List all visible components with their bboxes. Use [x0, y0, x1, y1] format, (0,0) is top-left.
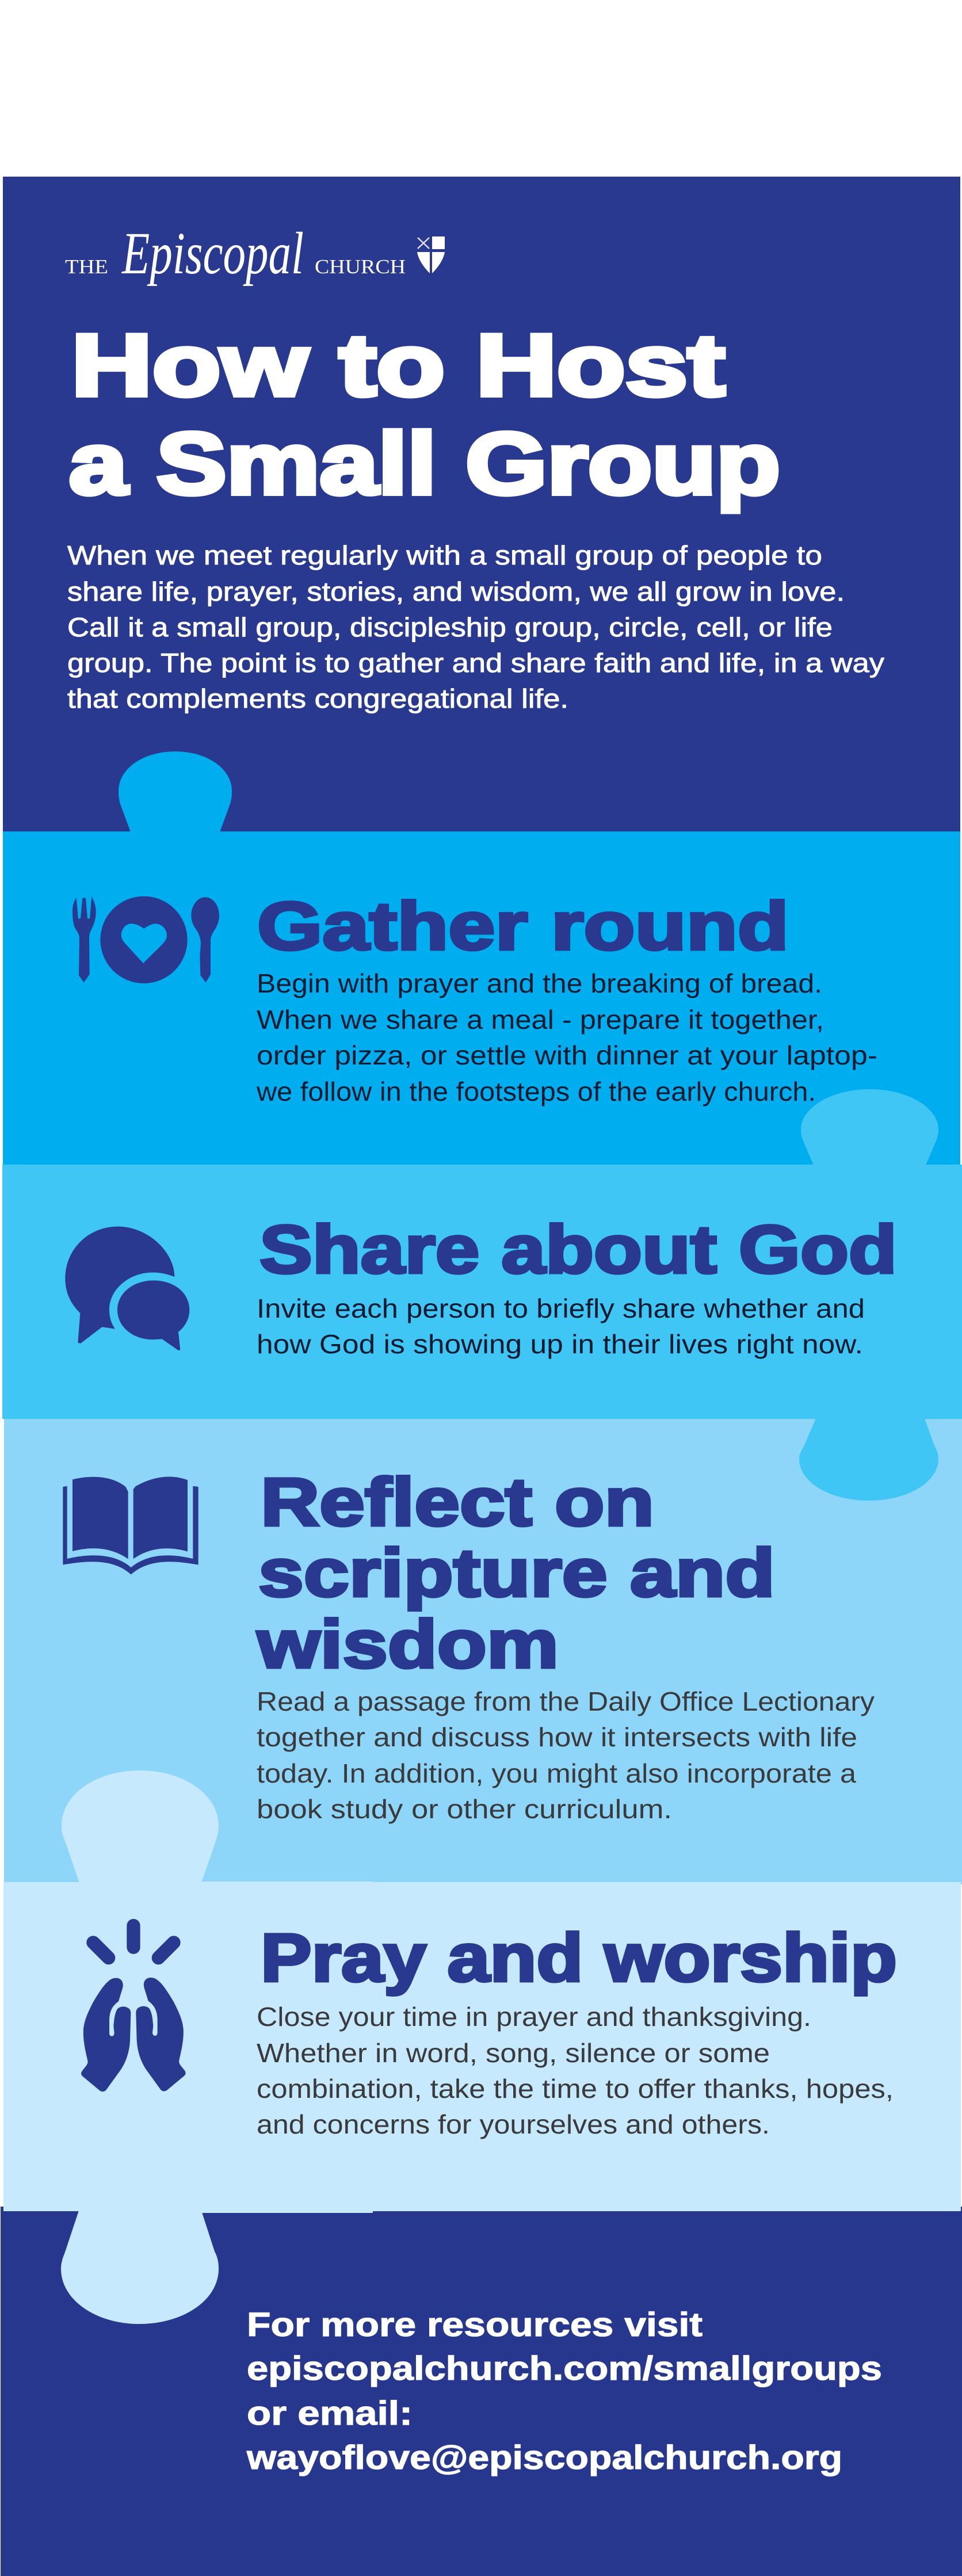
body: share about God: how God is showing up in their lives right now. [257, 1329, 863, 1359]
body: pray and worship: combination, take the time to offer thanks, hopes, [257, 2074, 894, 2104]
panel: footer [1, 2207, 962, 2576]
intro text [67, 540, 884, 713]
title: a Small Group [69, 415, 780, 513]
footer text [246, 2306, 882, 2476]
body: reflect: book study or other curriculum. [257, 1794, 672, 1824]
logo: The Episcopal Church [65, 220, 445, 287]
panel: pray and worship [3, 1770, 961, 2213]
body: gather round: Begin with prayer and the breaking of bread. [257, 968, 822, 998]
body: gather round: order pizza, or settle with dinner at your laptop- [257, 1040, 877, 1070]
intro text: that complements congregational life. [67, 684, 568, 713]
body: reflect: together and discuss how it intersects with life [257, 1722, 857, 1752]
icon: speech bubbles [65, 1227, 189, 1350]
footer text: episcopalchurch.com/smallgroups [247, 2350, 882, 2387]
heading: reflect: scripture and [258, 1535, 775, 1611]
intro text: When we meet regularly with a small group of people to [67, 540, 822, 570]
body: reflect: Read a passage from the Daily Office Lectionary [257, 1686, 875, 1716]
body: share about God [257, 1293, 865, 1359]
body: gather round [256, 968, 877, 1106]
heading: reflect: wisdom [257, 1606, 559, 1682]
puzzle tab: pray down [61, 2211, 219, 2324]
footer text: or email: [247, 2395, 413, 2432]
body: share about God: Invite each person to briefly share whether and [257, 1293, 865, 1323]
body: gather round: When we share a meal - prepare it together, [257, 1005, 824, 1035]
logo: The Episcopal Church: THE [65, 255, 108, 278]
icon: shield [417, 236, 445, 273]
body: pray and worship: and concerns for yourselves and others. [257, 2109, 770, 2139]
body: pray and worship: Close your time in prayer and thanksgiving. [257, 2002, 811, 2032]
heading: pray and worship: Pray and worship [261, 1920, 897, 1996]
panel: gather round [3, 751, 960, 1165]
puzzle tab: pray up [62, 1770, 219, 1883]
intro text: group. The point is to gather and share faith and life, in a way [67, 648, 884, 678]
heading: share about God: Share about God [259, 1212, 897, 1288]
body: reflect [257, 1686, 875, 1824]
puzzle tab: gather [119, 751, 232, 832]
panel: reflect on scripture and wisdom [4, 1415, 962, 1884]
logo: The Episcopal Church: CHURCH [315, 255, 406, 278]
body: gather round: we follow in the footsteps of the early church. [256, 1077, 816, 1106]
intro text: share life, prayer, stories, and wisdom, we all grow in love. [67, 577, 845, 606]
puzzle tab: share up [801, 1089, 938, 1165]
title: How to Host [71, 316, 725, 414]
icon: open book [63, 1476, 198, 1574]
logo: The Episcopal Church: Episcopal [121, 220, 304, 287]
footer text: For more resources visit [247, 2306, 703, 2344]
puzzle tab: share down [799, 1418, 938, 1501]
footer text: wayoflove@episcopalchurch.org [246, 2439, 842, 2476]
intro text: Call it a small group, discipleship group, circle, cell, or life [67, 612, 833, 642]
body: pray and worship: Whether in word, song, silence or some [257, 2038, 770, 2068]
heading: gather round: Gather round [257, 888, 789, 964]
heading: reflect: Reflect on [261, 1464, 654, 1540]
body: reflect: today. In addition, you might also incorporate a [257, 1758, 856, 1788]
icon: plate, fork and spoon [72, 896, 219, 983]
heading: reflect [257, 1464, 775, 1682]
body: pray and worship [257, 2002, 894, 2139]
panel: header [3, 177, 960, 833]
title [69, 316, 780, 513]
panel: share about God [2, 1089, 962, 1501]
icon: praying hands [81, 1926, 186, 2092]
